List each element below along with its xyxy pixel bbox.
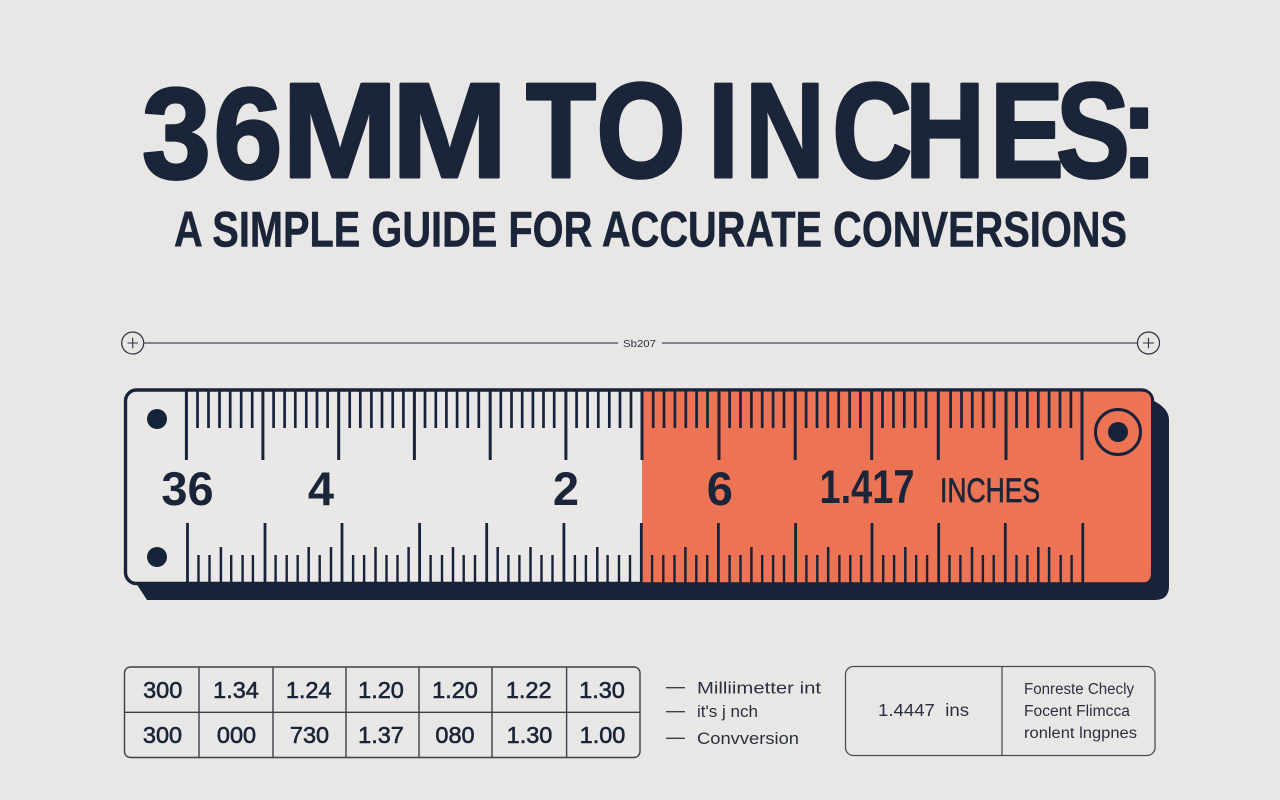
bottom ticks <box>188 523 1083 584</box>
result box: Fonreste Checly <box>1024 681 1134 698</box>
legend <box>666 678 821 748</box>
ruler numbers: 6 <box>707 462 733 515</box>
table row 1: 1.30 <box>579 677 625 703</box>
table row 1: 1.20 <box>432 677 478 703</box>
ruler body <box>126 390 1152 584</box>
top ticks <box>186 391 1082 460</box>
conversion table <box>124 667 640 758</box>
ruler numbers: 36 <box>161 462 214 515</box>
table row 1: 1.22 <box>506 677 552 703</box>
icon: right target hole <box>1096 410 1140 454</box>
title: INCHES: <box>708 56 1158 207</box>
table row 2: 080 <box>435 722 475 748</box>
table row 1: 300 <box>143 677 182 703</box>
table row 1: 1.20 <box>358 677 404 703</box>
ruler numbers <box>161 460 1040 515</box>
table row 2: 1.30 <box>507 722 552 748</box>
table row 2: 730 <box>290 722 329 748</box>
legend: it's j nch <box>697 702 758 721</box>
table row 2: 000 <box>217 722 256 748</box>
orange inch section <box>642 392 1151 583</box>
result box: 1.4447 ins <box>878 700 969 720</box>
result box: ronlent lngpnes <box>1024 725 1137 742</box>
ruler numbers: 4 <box>308 462 334 515</box>
result box <box>846 666 1155 756</box>
icon: left bottom hole <box>147 547 167 567</box>
icon: left top hole <box>147 409 167 429</box>
dimension line <box>122 332 1160 354</box>
table row 1 <box>143 677 625 703</box>
ruler bottom edge <box>134 582 1150 584</box>
ruler numbers: 1.417 <box>820 460 914 513</box>
table row 2: 1.37 <box>358 722 404 748</box>
table row 2: 1.00 <box>580 722 625 748</box>
table row 2: 300 <box>143 722 182 748</box>
title <box>142 55 1158 207</box>
ruler numbers: 2 <box>553 462 579 515</box>
legend: Milliimetter int <box>697 678 821 698</box>
table row 1: 1.34 <box>213 677 259 703</box>
ruler <box>126 390 1169 600</box>
result box: Focent Flimcca <box>1024 703 1130 720</box>
title: MM <box>282 56 508 207</box>
dimension line: Sb207 <box>623 338 656 350</box>
ruler shadow <box>134 400 1169 600</box>
legend: Convversion <box>697 729 799 748</box>
title: TO <box>526 55 686 206</box>
table row 2 <box>143 722 625 748</box>
table row 1: 1.24 <box>286 677 332 703</box>
ruler numbers: INCHES <box>940 472 1040 510</box>
title: 36 <box>142 62 282 206</box>
table grid <box>124 667 640 758</box>
